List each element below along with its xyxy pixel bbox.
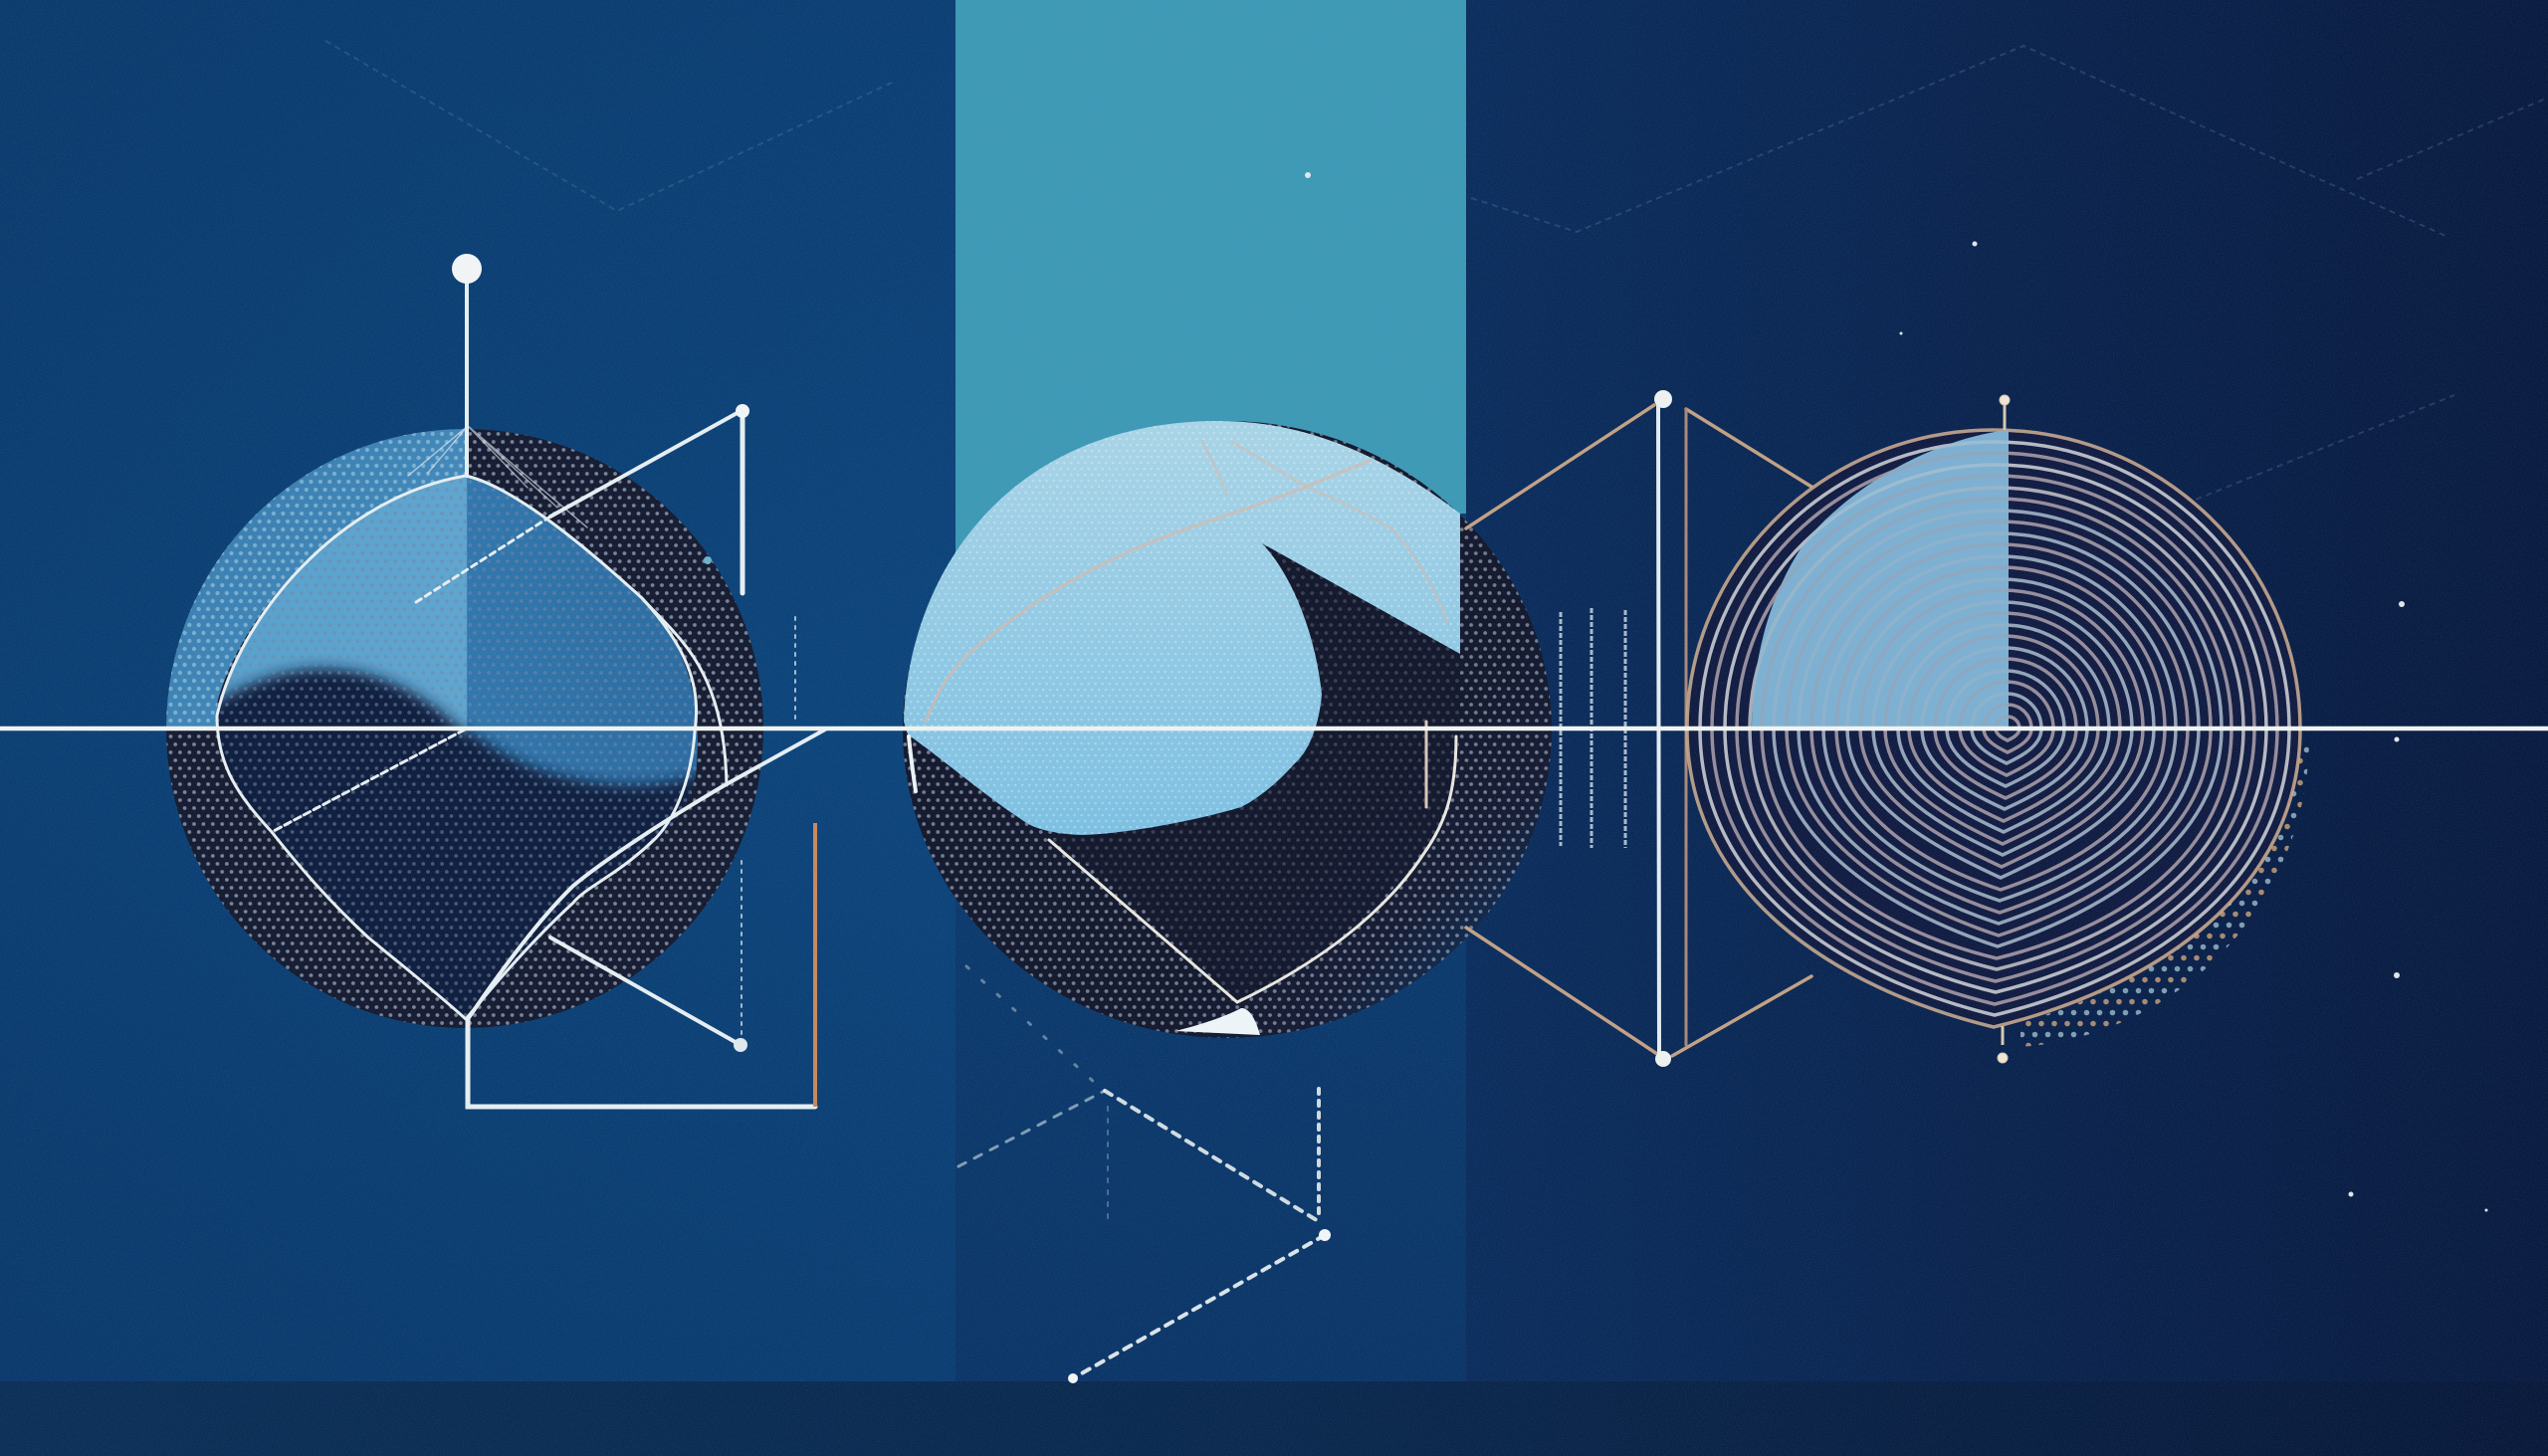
sphere 2: pale blue shape [904, 421, 1460, 835]
scattered small dots [704, 172, 2488, 1212]
sphere 1: node dots and orange marker [452, 254, 815, 1107]
sphere 3: pale quadrant [1752, 430, 2009, 729]
sphere 2: contour lines [909, 441, 1456, 1002]
sphere 2: white highlight wedge [1175, 1008, 1260, 1035]
teal vertical band [956, 0, 1466, 597]
hexagon frame with vertical axes [1466, 390, 1811, 1067]
sphere 3: concentric ring lines [1687, 430, 2300, 1027]
sphere 2: dark dotted disc [903, 421, 1552, 1038]
sphere 3: halftone crescent [2020, 741, 2309, 1047]
horizon line [0, 727, 2548, 730]
sphere 3: pale quadrant wash over rings [1752, 430, 2009, 729]
faint background dashed lines [325, 41, 2548, 504]
bottom dark strip [0, 1381, 2548, 1456]
sphere 1: white construction lines [217, 269, 825, 1107]
triple dashed vertical lines [1561, 608, 1625, 848]
background panel: middle column [956, 0, 1466, 1456]
background panel: right column [1466, 0, 2548, 1456]
background panel: left column [0, 0, 956, 1456]
sphere 3: top and bottom pins [1998, 395, 2010, 1063]
sphere 2: dashed diagram below [958, 966, 1331, 1383]
sphere 3: dark disc [1687, 430, 2300, 1027]
sphere 1: dotted blue and dark disc [149, 429, 763, 1055]
